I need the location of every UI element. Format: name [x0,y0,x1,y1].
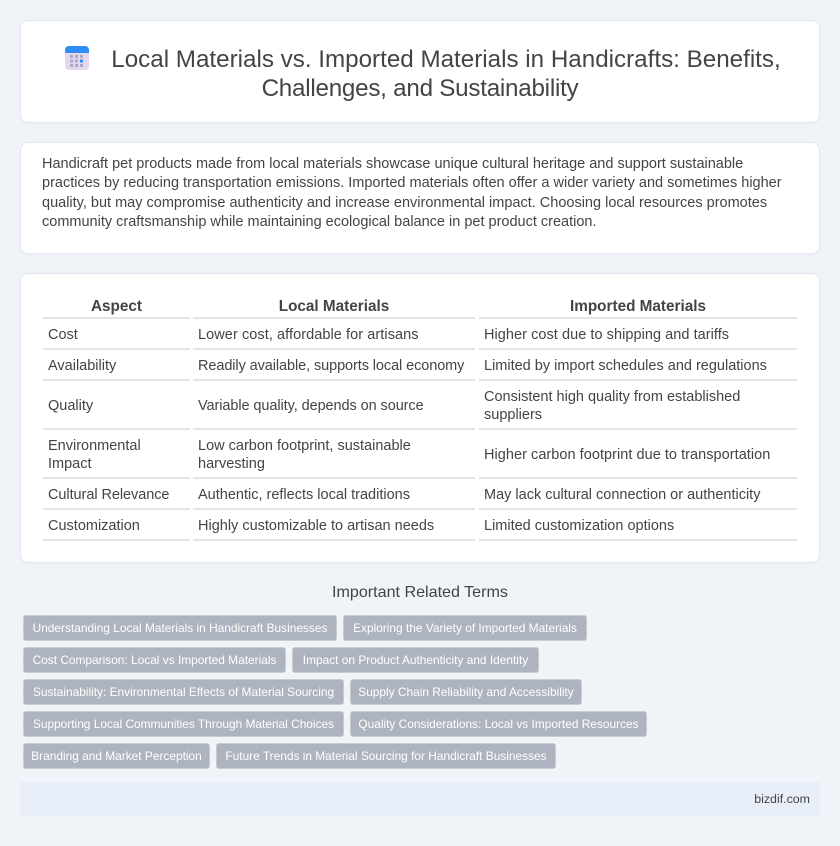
tag: Branding and Market Perception [31,749,202,763]
tag [292,647,539,673]
tag: Supply Chain Reliability and Accessibility [358,685,574,699]
row: environmental impact, aspect [48,438,141,472]
row: cost, local: Lower cost, affordable for artisans [198,327,419,343]
tag [23,711,344,737]
row: cost, aspect: Cost [48,327,78,343]
row: environmental impact, local [198,438,411,472]
row: environmental impact, local: harvesting [198,456,265,472]
row: quality, imported: Consistent high quality from established [484,389,740,405]
tag: Understanding Local Materials in Handicraft Businesses [33,621,327,635]
tag [23,743,210,769]
row: environmental impact, aspect: Impact [48,456,92,472]
introduction text: practices by reducing transportation emissions. Imported materials often offer a wider variety and sometimes higher [42,175,782,191]
row: quality, local: Variable quality, depends on source [198,398,424,414]
title: Challenges, and Sustainability [262,75,578,102]
row: quality, aspect: Quality [48,398,93,414]
title: Local Materials vs. Imported Materials in Handicrafts: Benefits, [111,46,781,73]
tag: Exploring the Variety of Imported Materials [353,621,577,635]
footer: source: bizdif.com [754,792,810,806]
row: availability, local: Readily available, supports local economy [198,358,464,374]
tag [23,647,286,673]
tag [350,679,582,705]
panel: title card [20,20,820,123]
row: customization, aspect: Customization [48,518,140,534]
row: cultural relevance, local: Authentic, reflects local traditions [198,487,410,503]
tag [216,743,556,769]
row: availability, imported: Limited by import schedules and regulations [484,358,767,374]
introduction text: community craftsmanship while maintaining ecological balance in pet product creation. [42,214,597,230]
heading: important related terms: Important Related Terms [332,583,508,601]
introduction text [42,156,782,230]
table header: local materials: Local Materials [279,298,389,315]
row: environmental impact, local: Low carbon footprint, sustainable [198,438,411,454]
row: availability, aspect: Availability [48,358,116,374]
row: customization, imported: Limited customization options [484,518,674,534]
row: cultural relevance, aspect: Cultural Relevance [48,487,169,503]
row: customization, local: Highly customizable to artisan needs [198,518,434,534]
introduction text: quality, but may compromise authenticity and increase environmental impact. Choosing local resources promotes [42,195,767,211]
tag: Impact on Product Authenticity and Identity [303,653,528,667]
tag: Future Trends in Material Sourcing for Handicraft Businesses [225,749,547,763]
footer bar [20,782,820,816]
tag [343,615,587,641]
row: environmental impact, aspect: Environmental [48,438,141,454]
row: quality, imported: suppliers [484,407,542,423]
tag [23,615,337,641]
table header: aspect: Aspect [91,298,142,315]
icon: calendar [65,46,89,70]
tag [350,711,647,737]
tag: Supporting Local Communities Through Material Choices [33,717,334,731]
tag: Quality Considerations: Local vs Imported Resources [358,717,639,731]
table header: imported materials: Imported Materials [570,298,706,315]
row: quality, imported [484,389,740,423]
tag [23,679,344,705]
tag: Sustainability: Environmental Effects of Material Sourcing [33,685,334,699]
row: cultural relevance, imported: May lack cultural connection or authenticity [484,487,760,503]
tag: Cost Comparison: Local vs Imported Materials [33,653,276,667]
title [111,46,781,102]
introduction text: Handicraft pet products made from local materials showcase unique cultural heritage and support sustainable [42,156,743,172]
row: environmental impact, imported: Higher carbon footprint due to transportation [484,447,770,463]
panel: introduction card [20,142,820,254]
panel: comparison table [20,273,820,563]
row: cost, imported: Higher cost due to shipping and tariffs [484,327,729,343]
